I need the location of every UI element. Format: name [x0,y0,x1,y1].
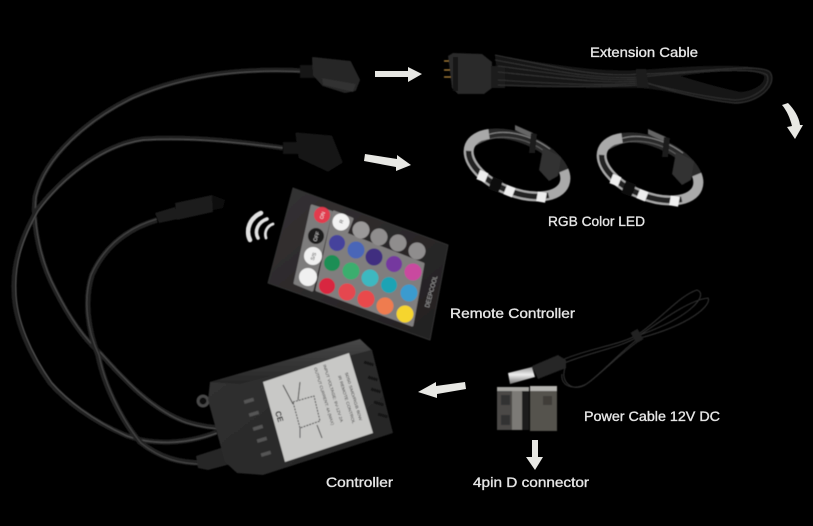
label text [273,364,364,426]
power cable [508,290,708,387]
icon: wireless signal [248,213,273,240]
remote controller [268,188,448,340]
label text: OUTPUT CURRENT: 4A (MAX) [313,367,336,426]
arrow: power to controller [418,382,466,398]
left button panel [295,206,331,290]
cable tie [636,69,649,88]
connector: top cable 4-pin female [300,58,359,92]
cables to controller [14,70,308,464]
connector: small plug [155,195,225,223]
wire loops [562,290,708,387]
dark LED strip [460,121,574,209]
plug body [532,355,566,379]
wire bundle [495,55,772,103]
button captions: ON [319,211,327,220]
LEDs [476,170,489,183]
heading: 4pin D connector: 4pin D connector [473,474,589,490]
arrow: curved down [782,103,803,139]
heading: RGB Color LED: RGB Color LED [548,213,645,229]
label text: 5050 SMD/RGB 60W [344,372,364,421]
wiring diagram on label [283,382,322,438]
controller box [196,339,393,475]
label text: IR REMOTE CONTROL [337,375,357,425]
button captions: OFF [313,231,322,242]
LED strip right [593,125,707,213]
loop hole [680,71,764,92]
4pin D connector [497,386,557,431]
mounting lug [198,396,208,406]
plug barrel [508,367,535,384]
arrow: connector to LED strips [364,154,411,171]
button captions: R [339,219,346,224]
function buttons [314,207,330,223]
case top face [210,339,371,384]
body [268,188,448,340]
case [208,339,393,475]
fins [244,398,271,457]
spec label [263,353,373,462]
connector head [448,53,492,94]
heading: Remote Controller: Remote Controller [450,305,575,321]
pins [444,61,453,77]
wire bundle base [495,55,772,104]
extension cable [444,53,772,104]
connector: second cable 4-pin female [283,134,341,170]
label text: INPUT VOLTAGE: 9V-12V 2A [322,364,344,423]
brand mark: DEEPCOOL [424,274,440,309]
label text: CE [273,410,285,424]
LED strip left [460,121,574,209]
upper wire band [460,121,574,209]
button captions: S/S [310,251,318,261]
heading: Controller: Controller [326,474,393,490]
main button panel [317,212,423,325]
arrow: down to 4pin connector [526,440,543,470]
colour buttons [329,235,345,251]
cable tie [631,329,643,343]
button captions [310,211,346,261]
arrow: connector to extension cable [375,67,422,82]
lower translucent LED band [460,121,574,209]
strain relief [196,447,238,470]
plug and tie [515,125,533,138]
heading: Extension Cable: Extension Cable [590,44,698,60]
heading: Power Cable 12V DC: Power Cable 12V DC [584,408,720,424]
